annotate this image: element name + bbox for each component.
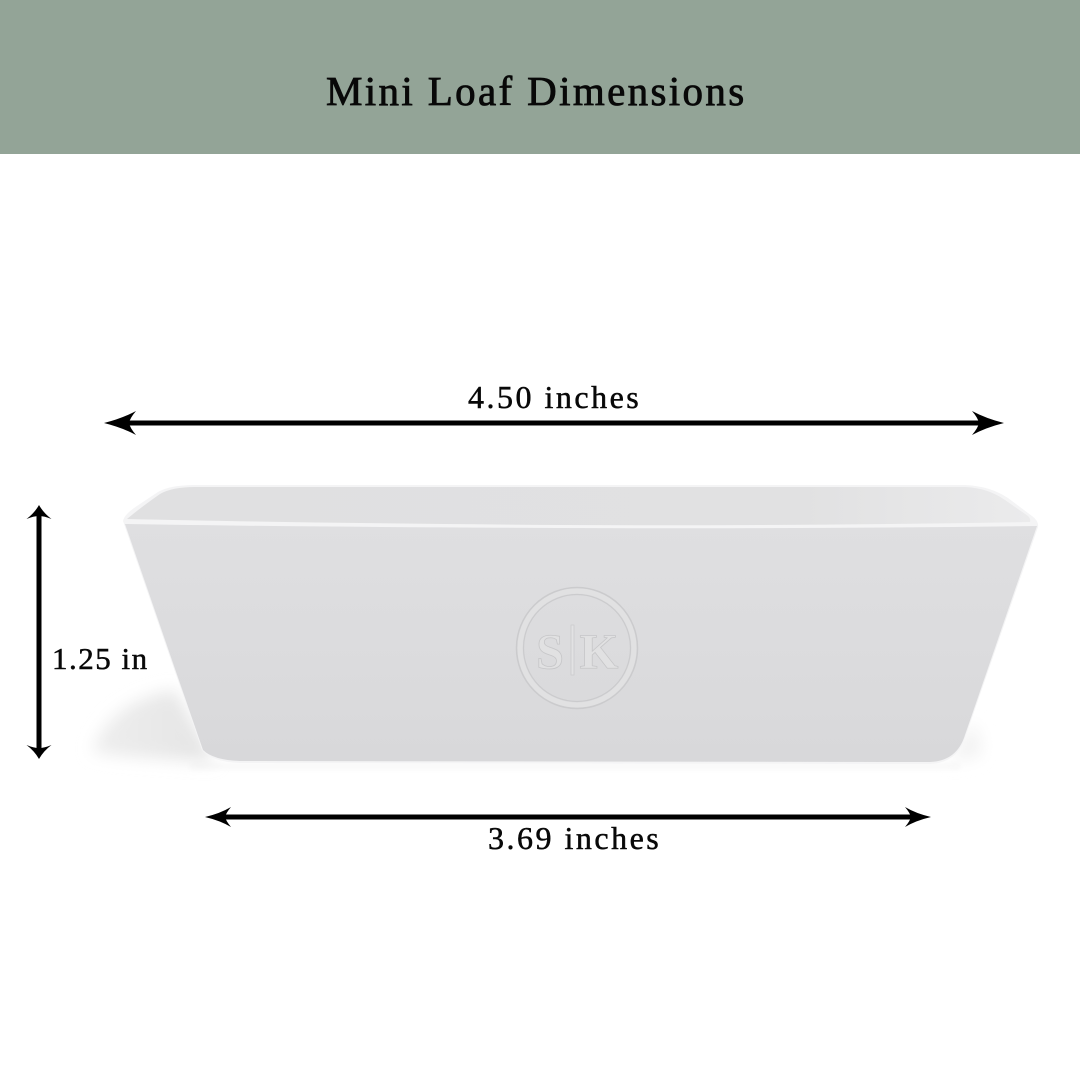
label: bottom width: 3.69 inches [488,820,661,856]
embossed logo: K [580,623,619,679]
arrow: bottom width [205,807,931,827]
label: height: 1.25 in [52,641,149,676]
embossed logo: S [536,623,564,679]
embossed logo [516,588,638,708]
pan interior [127,487,1030,525]
pan shadow [92,690,981,769]
pan front [125,524,1037,762]
header band [0,0,1080,154]
title: Mini Loaf Dimensions [326,68,747,114]
arrow: height [26,505,52,759]
arrow: top width [104,411,1004,435]
pan body [123,485,1038,764]
label: top width: 4.50 inches [468,379,641,415]
